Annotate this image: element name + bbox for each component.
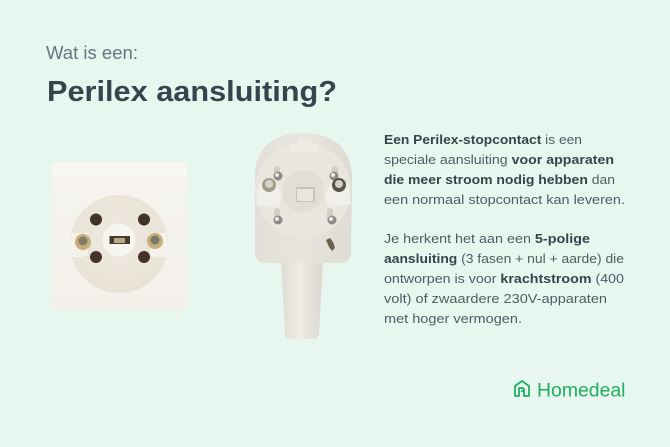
logo: Homedeal: Homedeal [537,380,626,402]
text block: recognition: Je herkent het aan een 5-polige [384,231,590,246]
image: Perilex plug [255,133,352,339]
text block: definition: een normaal stopcontact kan leveren. [384,192,625,207]
text block: recognition: aansluiting (3 fasen + nul + aarde) die [384,251,624,266]
text block: recognition: met hoger vermogen. [384,311,522,326]
title: Perilex aansluiting? [47,76,337,108]
text block: recognition: ontworpen is voor krachtstroom (400 [384,271,624,286]
icon: house [515,381,529,396]
text block: recognition: volt) of zwaardere 230V-apparaten [384,291,607,306]
text block: definition: speciale aansluiting voor apparaten [384,152,614,167]
text block: definition [384,132,625,207]
subtitle: Wat is een: [46,42,138,63]
text block: definition: die meer stroom nodig hebben dan [384,172,615,187]
text block: definition: Een Perilex-stopcontact is een [384,132,582,147]
text block: recognition [384,231,624,326]
image: Perilex wall socket [51,162,187,311]
